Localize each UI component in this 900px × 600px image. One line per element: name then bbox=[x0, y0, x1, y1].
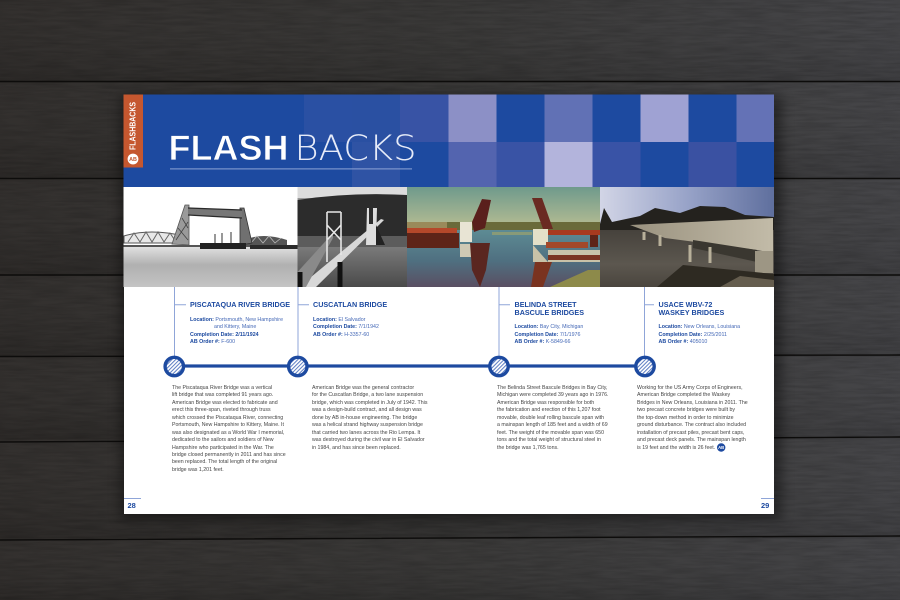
details: Cuscatlan Bridge bbox=[313, 317, 379, 338]
details: Cuscatlan Bridge: Location: El Salvador bbox=[313, 317, 365, 323]
body text: USACE WBV-72 Waskey Bridges: Working for the US Army Corps of Engineers, bbox=[637, 385, 743, 391]
details: Belinda Street Bascule Bridges: Completion Date: 7/1/1976 bbox=[514, 332, 580, 338]
body text: USACE WBV-72 Waskey Bridges: and precast deck panels. The mainspan length bbox=[637, 437, 746, 443]
body text: Belinda Street Bascule Bridges: the bridge was 1,765 tons. bbox=[497, 444, 559, 450]
body text: Piscataqua River Bridge: bridge was 1,201 feet. bbox=[172, 467, 224, 473]
heading: Cuscatlan Bridge: CUSCATLAN BRIDGE bbox=[313, 300, 387, 309]
body text: USACE WBV-72 Waskey Bridges bbox=[637, 385, 748, 450]
body text: Piscataqua River Bridge: dedicated to the sailors and soldiers of New bbox=[172, 437, 274, 443]
body text: Belinda Street Bascule Bridges: the fabrication and erection of this 1,207 foot bbox=[497, 407, 601, 413]
heading: Belinda Street Bascule Bridges: BASCULE BRIDGES bbox=[514, 308, 584, 316]
heading: USACE WBV-72 Waskey Bridges bbox=[658, 300, 724, 316]
body text: Cuscatlan Bridge: was a design-build contract, and all design was bbox=[312, 407, 422, 413]
page number left bbox=[124, 498, 140, 510]
body text: USACE WBV-72 Waskey Bridges: Bridges in New Orleans, Louisiana in 2011. The bbox=[637, 400, 748, 406]
body text: Cuscatlan Bridge: for the Cuscatlan Bridge, a two lane suspension bbox=[312, 392, 423, 398]
details: Belinda Street Bascule Bridges bbox=[514, 324, 583, 345]
body text: Belinda Street Bascule Bridges: American Bridge was responsible for both bbox=[497, 400, 594, 406]
icon: AB logo bbox=[128, 154, 138, 164]
body text: USACE WBV-72 Waskey Bridges: installation of precast piles, precast bent caps, bbox=[637, 430, 744, 436]
body text: Belinda Street Bascule Bridges: tons and the total weight of structural steel in bbox=[497, 437, 601, 443]
body text: Belinda Street Bascule Bridges bbox=[497, 385, 608, 450]
body text: Belinda Street Bascule Bridges: Michigan were completed 39 years ago in 1976. bbox=[497, 392, 608, 398]
body text: Piscataqua River Bridge: The Piscataqua River Bridge was a vertical bbox=[172, 385, 272, 391]
details: Cuscatlan Bridge: Completion Date: 7/1/1942 bbox=[313, 324, 379, 330]
body text: USACE WBV-72 Waskey Bridges: two precast concrete bridges were built by bbox=[637, 407, 735, 413]
body text: Cuscatlan Bridge: done by AB in-house engineering. The bridge bbox=[312, 415, 417, 421]
title: BACKS bbox=[294, 129, 416, 169]
marker: Belinda Street Bascule Bridges bbox=[490, 357, 508, 376]
details: Piscataqua River Bridge: Completion Date: 2/11/1924 bbox=[190, 332, 259, 338]
tab label: FLASHBACKS bbox=[128, 102, 138, 150]
heading: Belinda Street Bascule Bridges: BELINDA STREET bbox=[514, 300, 577, 309]
details: Piscataqua River Bridge: Location: Portsmouth, New Hampshire bbox=[190, 317, 283, 323]
details: Piscataqua River Bridge bbox=[190, 317, 283, 345]
heading: Belinda Street Bascule Bridges bbox=[514, 300, 584, 316]
marker: Piscataqua River Bridge bbox=[165, 357, 184, 376]
details: USACE WBV-72 Waskey Bridges: AB Order #: 405010 bbox=[658, 339, 707, 345]
page number right bbox=[761, 498, 774, 510]
body text: Belinda Street Bascule Bridges: The Belinda Street Bascule Bridges in Bay City, bbox=[497, 385, 608, 391]
page number right: 29 bbox=[761, 500, 769, 510]
body text: Piscataqua River Bridge bbox=[172, 385, 286, 473]
page number left: 28 bbox=[128, 500, 136, 510]
body text: Piscataqua River Bridge: was also designated as a World War I memorial, bbox=[172, 430, 284, 436]
body text: Cuscatlan Bridge: was destroyed during the civil war in El Salvador bbox=[312, 437, 425, 443]
body text: Belinda Street Bascule Bridges: feet. The weight of the movable span was 650 bbox=[497, 430, 604, 436]
body text: Cuscatlan Bridge: was a helical strand highway suspension bridge bbox=[312, 422, 423, 428]
heading: Piscataqua River Bridge: PISCATAQUA RIVER BRIDGE bbox=[190, 300, 290, 309]
body text: USACE WBV-72 Waskey Bridges: ground disturbance. The contract also included bbox=[637, 422, 746, 428]
details: USACE WBV-72 Waskey Bridges: Completion Date: 2/25/2011 bbox=[658, 332, 727, 338]
details: Belinda Street Bascule Bridges: AB Order #: K-5849-66 bbox=[514, 339, 570, 345]
title: FLASH bbox=[168, 129, 288, 168]
details: Cuscatlan Bridge: AB Order #: H-3357-60 bbox=[313, 332, 369, 338]
body text: Belinda Street Bascule Bridges: a mainspan length of 185 feet and a width of 69 bbox=[497, 422, 608, 428]
body text: Piscataqua River Bridge: Portsmouth, New Hampshire to Kittery, Maine. It bbox=[172, 422, 284, 428]
body text: Cuscatlan Bridge: in 1984, and has since been replaced. bbox=[312, 444, 401, 450]
details: Piscataqua River Bridge: AB Order #: F-600 bbox=[190, 339, 235, 345]
body text: Piscataqua River Bridge: bridge closed permanently in 2011 and has since bbox=[172, 452, 286, 458]
details: USACE WBV-72 Waskey Bridges: Location: New Orleans, Louisiana bbox=[658, 324, 740, 330]
body text: Piscataqua River Bridge: been replaced. The total length of the original bbox=[172, 459, 277, 465]
body text: Piscataqua River Bridge: American Bridge was elected to fabricate and bbox=[172, 400, 278, 406]
body text: USACE WBV-72 Waskey Bridges: American Bridge completed the Waskey bbox=[637, 392, 730, 398]
body text: Cuscatlan Bridge: American Bridge was the general contractor bbox=[312, 385, 414, 391]
icon: AB logo: AB bbox=[129, 157, 137, 163]
body text: Piscataqua River Bridge: erect this three-span, riveted through truss bbox=[172, 407, 271, 413]
body text: Cuscatlan Bridge: that carried two lanes across the Rio Lempa. It bbox=[312, 430, 420, 436]
marker: USACE WBV-72 Waskey Bridges bbox=[636, 357, 654, 376]
icon: AB end mark: AB bbox=[718, 445, 724, 450]
details: USACE WBV-72 Waskey Bridges bbox=[658, 324, 740, 345]
heading: USACE WBV-72 Waskey Bridges: USACE WBV-72 bbox=[658, 300, 712, 309]
heading: USACE WBV-72 Waskey Bridges: WASKEY BRIDGES bbox=[658, 308, 724, 316]
body text: Cuscatlan Bridge: bridge, which was completed in July of 1942. This bbox=[312, 400, 427, 406]
marker: Cuscatlan Bridge bbox=[289, 357, 307, 376]
body text: Cuscatlan Bridge bbox=[312, 385, 428, 450]
body text: Piscataqua River Bridge: Hampshire who participated in the War. The bbox=[172, 444, 274, 450]
icon: AB end mark bbox=[717, 443, 726, 452]
details: Piscataqua River Bridge: and Kittery, Maine bbox=[214, 324, 256, 330]
details: Belinda Street Bascule Bridges: Location: Bay City, Michigan bbox=[514, 324, 583, 330]
panel: magazine spread page bbox=[124, 94, 774, 514]
body text: Belinda Street Bascule Bridges: movable, double leaf rolling bascule span with bbox=[497, 415, 604, 421]
body text: Piscataqua River Bridge: which crossed the Piscataqua River, connecting bbox=[172, 415, 283, 421]
body text: USACE WBV-72 Waskey Bridges: the top-down method in order to minimize bbox=[637, 415, 734, 421]
body text: Piscataqua River Bridge: lift bridge that was completed 91 years ago. bbox=[172, 392, 273, 398]
body text: USACE WBV-72 Waskey Bridges: is 19 feet and the width is 26 feet. bbox=[637, 444, 715, 450]
